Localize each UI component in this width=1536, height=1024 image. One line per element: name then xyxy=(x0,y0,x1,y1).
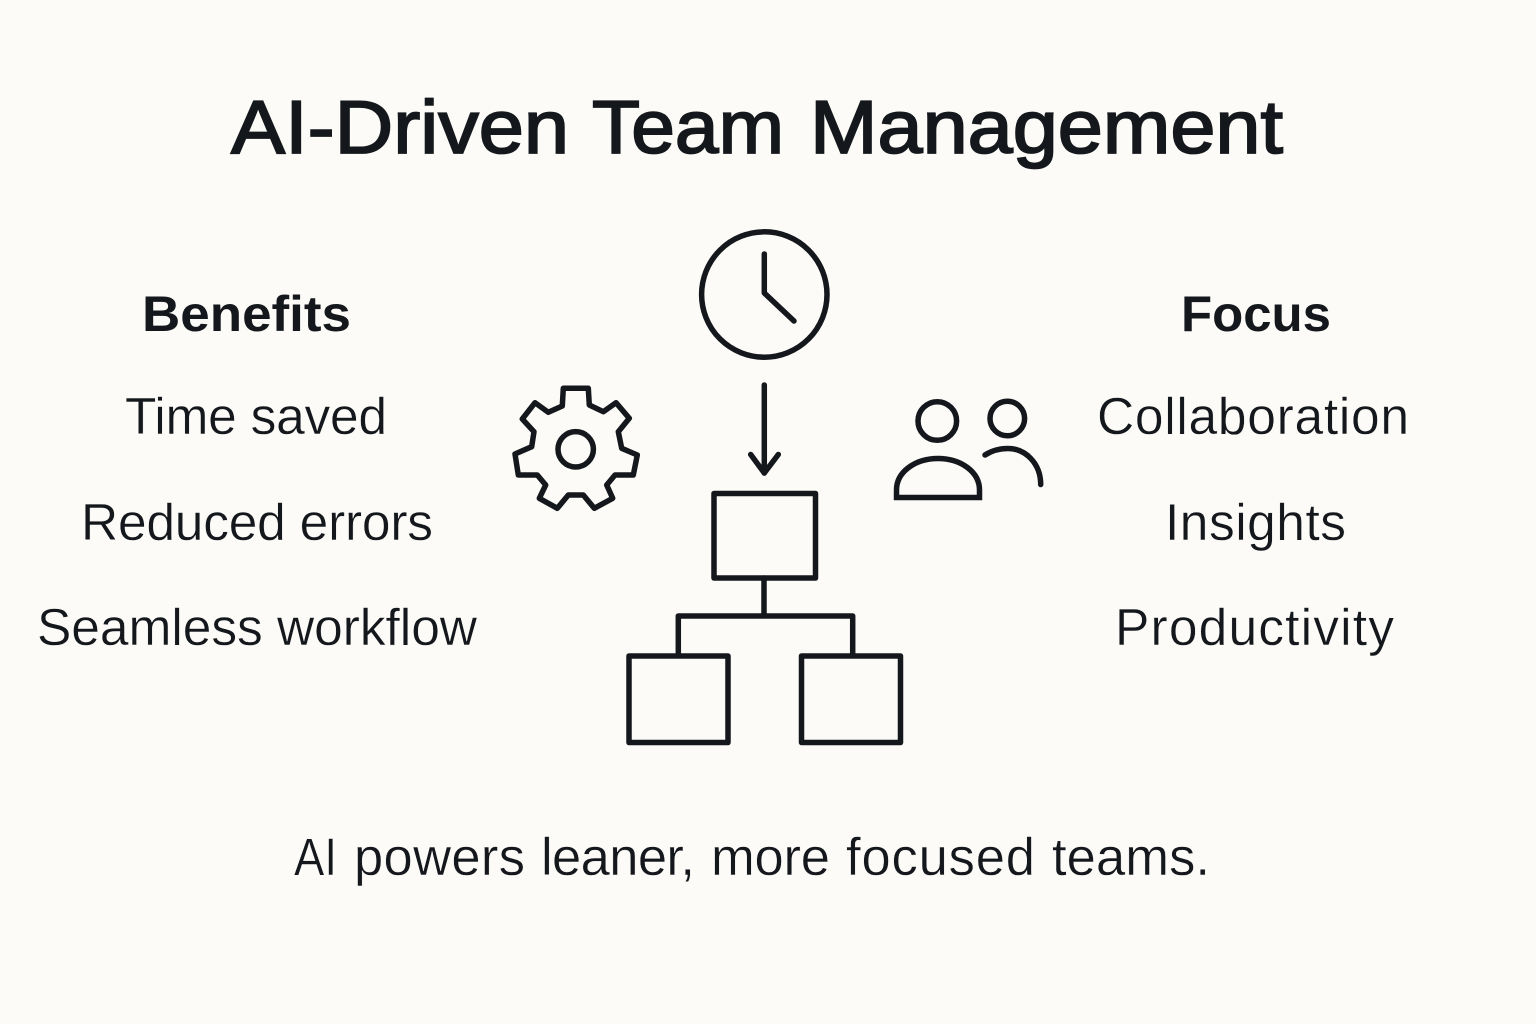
text: collaboration: Collaboration xyxy=(1097,387,1409,445)
text: reduced errors: Reduced errors xyxy=(81,493,433,551)
panel: benefits xyxy=(37,286,478,656)
panel: focus xyxy=(1097,286,1409,656)
text: time saved: Time saved xyxy=(125,387,387,445)
title: Team xyxy=(592,85,784,169)
heading: benefits: Benefits xyxy=(142,286,351,342)
icon: people xyxy=(896,401,1041,498)
footer tagline: teams. xyxy=(1052,828,1210,887)
icon: clock xyxy=(702,232,827,357)
footer tagline: more xyxy=(711,828,830,887)
footer tagline: AI xyxy=(294,828,337,887)
text: insights: Insights xyxy=(1165,493,1346,551)
text: seamless workflow: Seamless workflow xyxy=(37,598,478,656)
arrow: clock to org chart xyxy=(751,385,778,473)
footer tagline: powers xyxy=(354,828,525,887)
title: Management xyxy=(810,85,1283,169)
diagram: org chart xyxy=(629,494,900,742)
icon: gear xyxy=(515,388,637,508)
title: AI-Driven xyxy=(231,85,569,169)
footer tagline: focused xyxy=(846,828,1035,887)
text: productivity: Productivity xyxy=(1115,598,1394,656)
footer tagline: leaner, xyxy=(541,828,695,887)
heading: focus: Focus xyxy=(1181,286,1331,342)
